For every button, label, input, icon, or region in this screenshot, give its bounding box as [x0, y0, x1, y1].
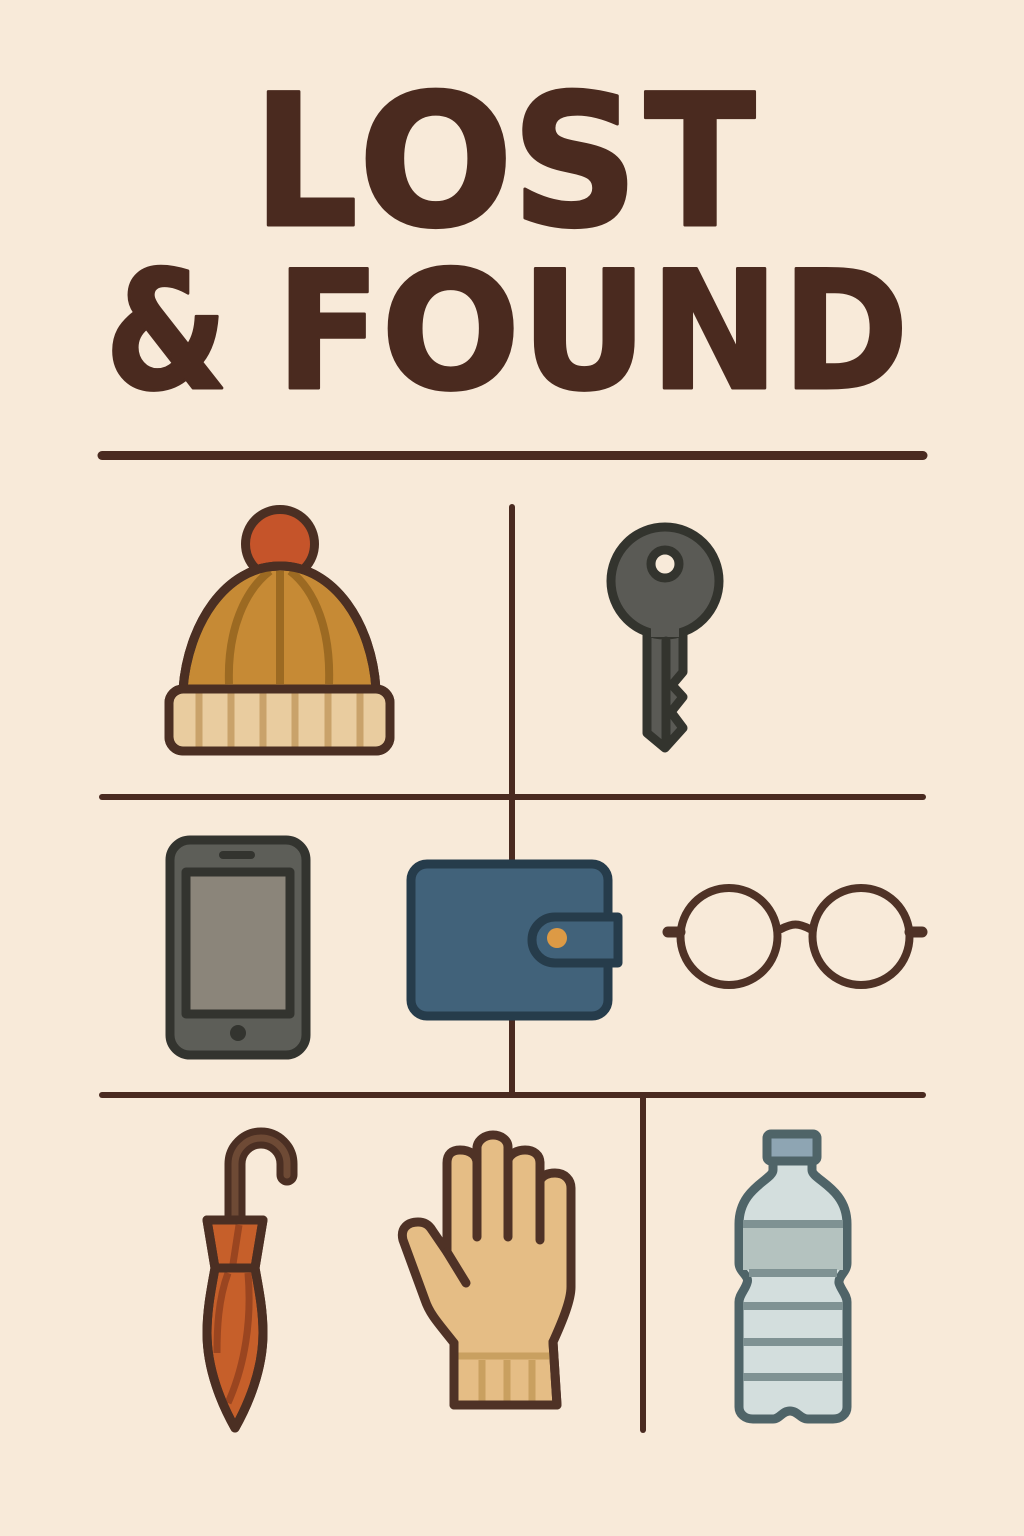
title: N	[650, 235, 779, 427]
title	[105, 55, 909, 428]
grid lines	[102, 456, 923, 1430]
title: O	[381, 236, 520, 427]
title: O	[358, 56, 514, 269]
icon: wallet	[411, 864, 618, 1016]
title: U	[521, 236, 648, 427]
icon: smartphone	[170, 840, 306, 1055]
title: S	[511, 55, 639, 269]
icon: beanie hat	[169, 510, 390, 751]
title: D	[782, 237, 909, 427]
icon: water bottle	[739, 1134, 847, 1419]
title: T	[644, 55, 756, 268]
icon: key	[611, 527, 719, 748]
title: L	[253, 56, 358, 269]
icon: glasses	[668, 888, 922, 985]
icon: umbrella	[207, 1138, 287, 1428]
title: F	[276, 237, 380, 427]
title: &	[105, 237, 228, 428]
icon: glove	[402, 1135, 571, 1405]
